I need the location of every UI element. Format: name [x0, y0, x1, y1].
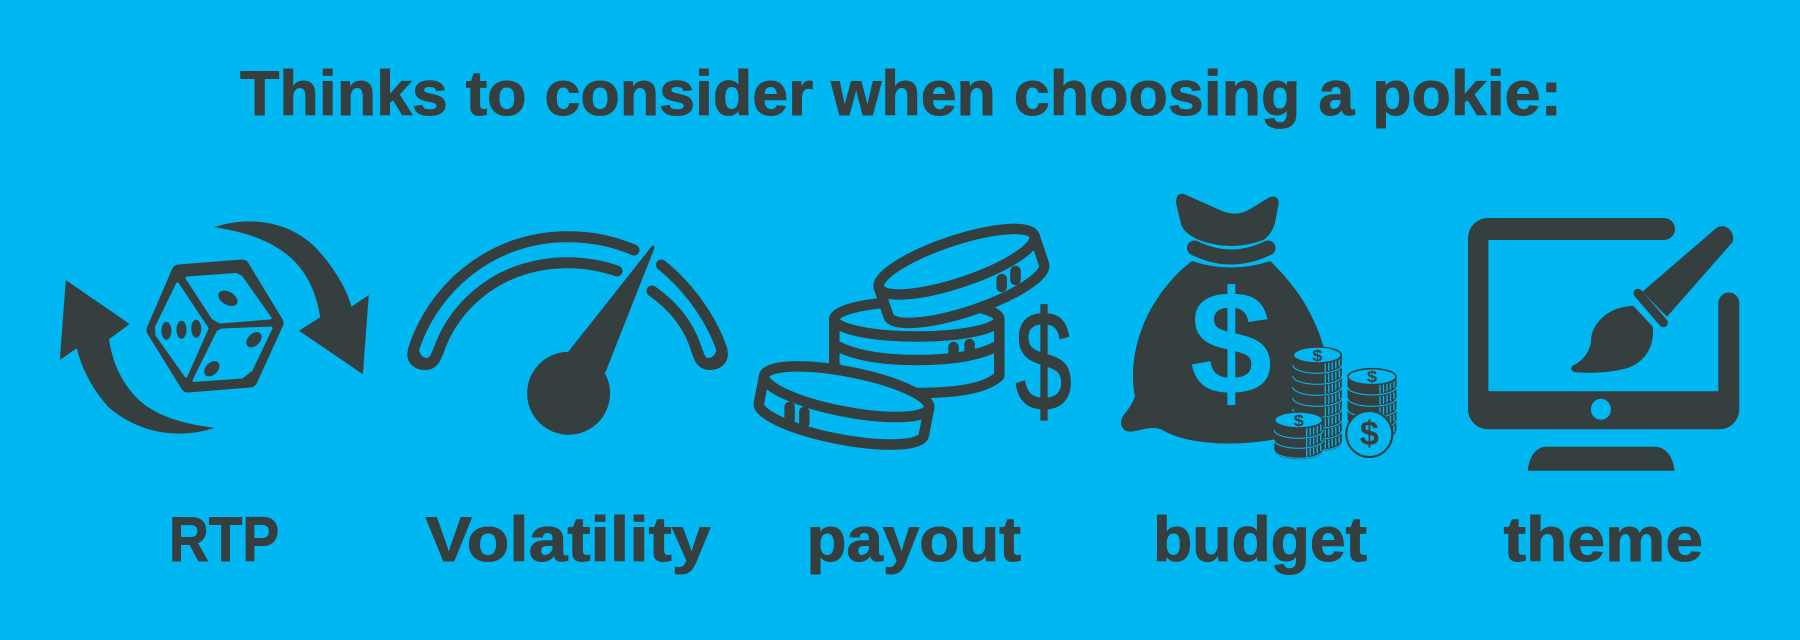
column: payout — [755, 216, 1072, 575]
label: RTP: RTP — [169, 505, 279, 575]
icon: stacked coins — [755, 216, 1051, 455]
icon: single dollar coin — [1346, 411, 1392, 457]
icon: coin stack front — [1274, 411, 1323, 459]
column: RTP — [60, 221, 369, 575]
label: budget: budget — [1153, 505, 1367, 575]
middle coin — [834, 302, 999, 393]
icon: money bag: $ — [1190, 261, 1272, 426]
icon: coin stack right — [1348, 367, 1396, 440]
icon: circular arrows — [60, 221, 369, 434]
icon: paintbrush — [1571, 226, 1733, 373]
column: Volatility — [407, 237, 728, 575]
label: payout: payout — [806, 505, 1021, 575]
icon: dollar sign: $ — [1015, 283, 1072, 441]
icon: coin stack back: $ — [1312, 346, 1323, 365]
icon: coin stack back — [1293, 346, 1342, 451]
icon: coin stack right: $ — [1367, 367, 1378, 386]
label: theme: theme — [1504, 505, 1703, 575]
label: Volatility: Volatility — [426, 505, 710, 575]
lower coin — [755, 356, 933, 455]
upper coin notches — [1002, 271, 1016, 287]
icon: computer monitor — [1468, 218, 1739, 471]
title: Thinks to consider when choosing a pokie: — [240, 59, 1562, 129]
column: budget — [1121, 194, 1396, 575]
icon: speedometer gauge — [407, 237, 728, 435]
icon: money bag — [1121, 194, 1330, 444]
icon: single dollar coin: $ — [1360, 415, 1379, 453]
column: theme — [1468, 218, 1739, 575]
lower coin notches — [790, 407, 804, 423]
upper coin — [872, 216, 1051, 336]
icon: coin stack front: $ — [1294, 411, 1304, 430]
icon: dice — [154, 267, 276, 385]
